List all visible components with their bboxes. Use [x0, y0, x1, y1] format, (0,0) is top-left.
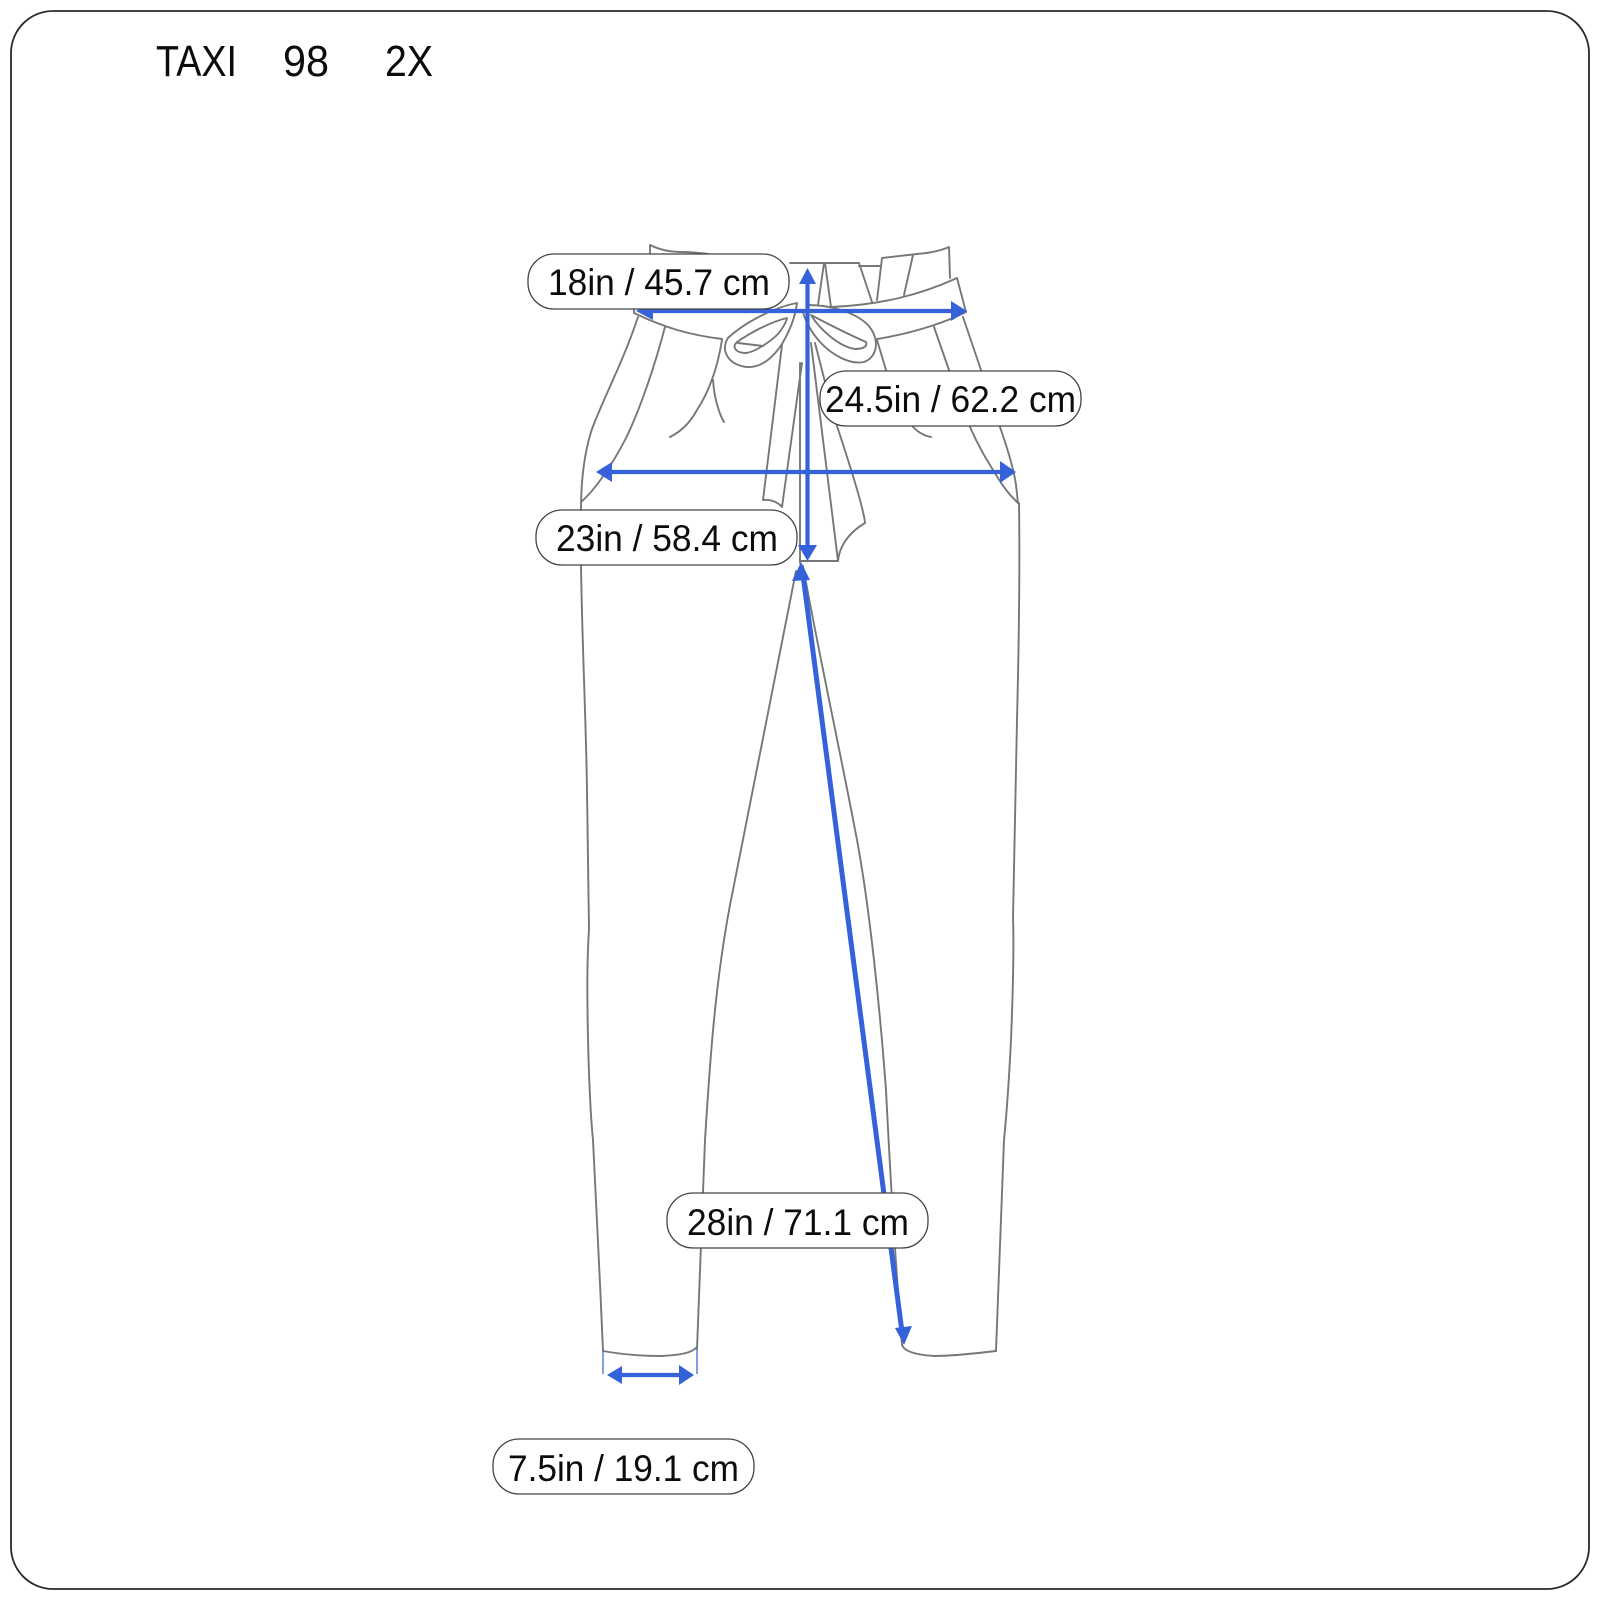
pants line drawing	[581, 245, 1019, 1356]
callout: inseam measurement	[667, 1193, 928, 1248]
callout: waist measurement: 18in / 45.7 cm	[548, 262, 770, 303]
arrow: leg opening	[603, 1347, 697, 1385]
arrow: waist width	[636, 301, 967, 321]
title: style, number and size	[156, 37, 433, 86]
left hip and pocket	[581, 317, 724, 510]
callout: waist measurement	[528, 254, 789, 309]
left bow loop	[725, 303, 797, 367]
title: style, number and size: 98	[283, 37, 329, 86]
title: style, number and size: 2X	[385, 37, 433, 86]
hanging ties	[763, 343, 865, 563]
callout: hip measurement: 23in / 58.4 cm	[556, 518, 778, 559]
arrow: inseam	[792, 562, 912, 1345]
belt	[634, 278, 966, 339]
left leg	[581, 565, 796, 1356]
arrow: front rise	[798, 268, 817, 561]
arrow: hip width	[596, 461, 1016, 483]
title: style, number and size: TAXI	[156, 37, 237, 86]
right hip and pocket	[877, 317, 1018, 503]
right bow loop	[803, 305, 876, 363]
callout: front rise measurement: 24.5in / 62.2 cm	[825, 379, 1076, 420]
callout: leg opening measurement: 7.5in / 19.1 cm	[508, 1448, 739, 1489]
callout: inseam measurement: 28in / 71.1 cm	[687, 1202, 909, 1243]
callout: leg opening measurement	[493, 1439, 754, 1494]
right leg	[803, 503, 1019, 1356]
callout: hip measurement	[536, 510, 797, 565]
waistband ruffle	[650, 245, 950, 307]
